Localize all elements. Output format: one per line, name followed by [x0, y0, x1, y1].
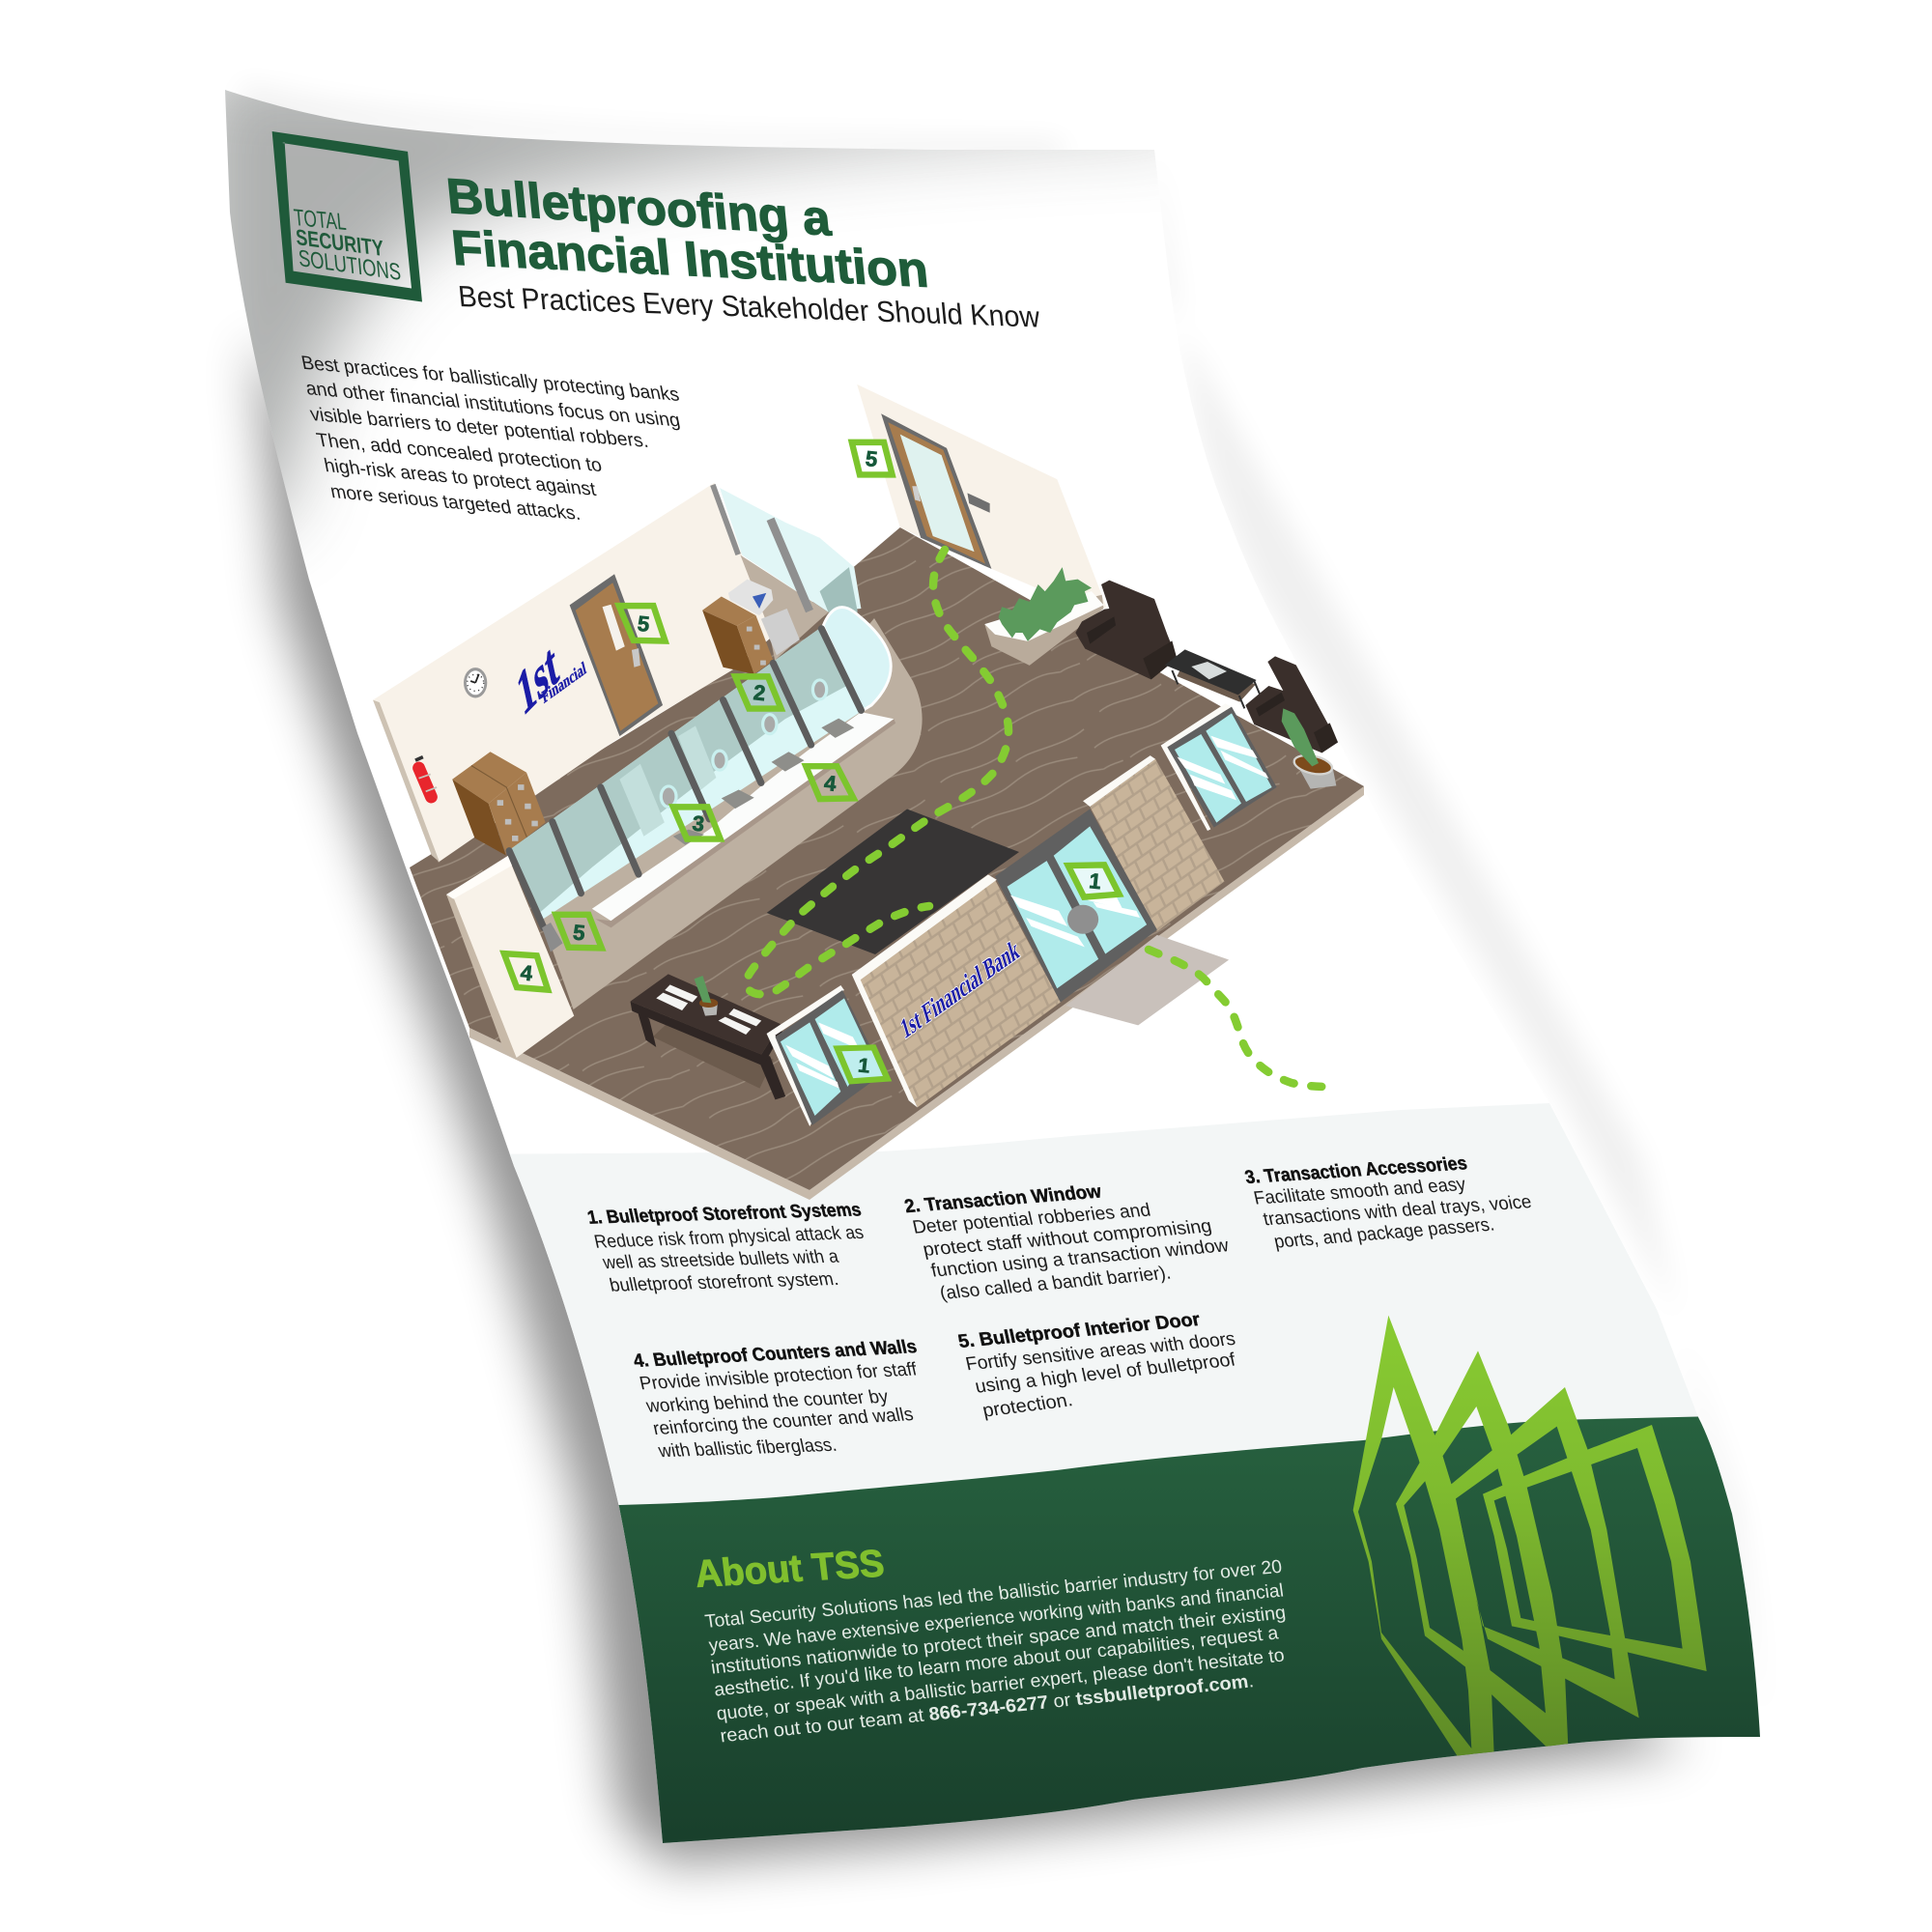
floor	[410, 527, 1364, 1190]
shape A	[1353, 1316, 1494, 1758]
badge 3	[673, 807, 721, 839]
about paragraph: reach out to our team at 866-734-6277 or tssbulletproof.com .	[719, 1670, 1255, 1747]
table shadow	[653, 1017, 774, 1089]
wall logo: 1st Financial: Financial	[540, 658, 587, 707]
entry step	[1065, 935, 1229, 1025]
intro paragraph: high-risk areas to protect against	[323, 455, 599, 500]
logo wordmark: SOLUTIONS	[298, 246, 402, 286]
item 3: transaction accessories: transactions with deal trays, voice	[1262, 1191, 1534, 1230]
item 3: transaction accessories: ports, and package passers.	[1272, 1214, 1496, 1253]
low table with plant	[630, 974, 785, 1099]
logo wordmark: SECURITY	[295, 225, 384, 261]
badge 1: front window: 1	[857, 1054, 871, 1077]
paper panels	[193, 58, 1797, 1864]
badge 2: 2	[753, 680, 767, 705]
intro paragraph	[299, 353, 682, 525]
clock	[464, 668, 487, 697]
entrance door	[995, 809, 1157, 1002]
file cabinet: small	[702, 596, 773, 674]
item 2: transaction window	[902, 1181, 1231, 1304]
front window	[767, 985, 880, 1126]
item 3: transaction accessories	[1243, 1152, 1534, 1253]
title: Bulletproofing a	[444, 169, 834, 246]
title	[444, 169, 931, 298]
badge 5: side door	[555, 915, 602, 948]
route: walking path outside	[1149, 950, 1329, 1087]
badge 5: side door: 5	[572, 921, 586, 945]
glass: rear panels	[710, 484, 861, 612]
item 5: interior door: 5. Bulletproof Interior Door	[956, 1309, 1203, 1352]
armchair right	[1245, 656, 1338, 753]
door sign	[967, 493, 990, 513]
glass: transaction window	[509, 626, 895, 927]
glass: curved end	[823, 608, 891, 710]
storefront sign: 1st Financial Bank	[897, 933, 1022, 1045]
badge 4: counter: 4	[823, 771, 838, 796]
planter grass	[999, 567, 1092, 641]
item 5: interior door: using a high level of bulletproof	[973, 1350, 1238, 1398]
badge 5: rear door: 5	[865, 446, 879, 471]
header and text layer	[272, 131, 1534, 1747]
badge 4: counter	[806, 766, 854, 799]
intro paragraph: visible barriers to deter potential robbers.	[308, 404, 650, 452]
item 1: storefront: bulletproof storefront system.	[608, 1268, 840, 1296]
item 3: transaction accessories: Facilitate smooth and easy	[1252, 1174, 1468, 1209]
left brick wall	[859, 880, 1061, 1107]
intro paragraph: more serious targeted attacks.	[328, 481, 582, 525]
intro paragraph: and other financial institutions focus on using	[304, 379, 682, 432]
badge 1: front window	[838, 1047, 888, 1081]
item 4: counters and walls: Provide invisible protection for staff	[638, 1359, 920, 1394]
table plant	[695, 976, 718, 1016]
paper sheet	[225, 90, 1760, 1843]
about paragraph: Total Security Solutions has led the ballistic barrier industry for over 20	[703, 1556, 1284, 1633]
file cabinet: large	[452, 752, 546, 855]
counter edge	[595, 719, 895, 927]
badge 1: entrance	[1068, 865, 1120, 897]
panel: top sheen shading	[193, 58, 1198, 522]
item 2: transaction window: protect staff without compromising	[921, 1215, 1213, 1261]
about paragraph: institutions nationwide to protect their space and match their existing	[710, 1603, 1287, 1679]
right window	[1161, 703, 1277, 831]
item 2: transaction window: (also called a bandit barrier).	[938, 1263, 1173, 1304]
item 2: transaction window: function using a transaction window	[929, 1235, 1231, 1282]
item 5: interior door: Fortify sensitive areas with doors	[964, 1328, 1237, 1375]
subtitle: Best Practices Every Stakeholder Should Know	[457, 280, 1042, 334]
item 1: storefront: well as streetside bullets with a	[600, 1246, 841, 1273]
route: walking path inside	[746, 550, 1009, 994]
shape C	[1449, 1387, 1639, 1718]
wall face	[857, 384, 1107, 609]
numbered badges	[504, 442, 1120, 1081]
tan behind counter	[740, 555, 828, 661]
item 5: interior door	[956, 1309, 1238, 1422]
item 1: storefront: 1. Bulletproof Storefront Systems	[585, 1200, 864, 1229]
shape B	[1396, 1350, 1568, 1749]
about paragraph: years. We have extensive experience working with banks and financial	[707, 1580, 1285, 1657]
wall face	[373, 483, 772, 862]
voice ports	[661, 680, 827, 807]
paper drop shadow	[242, 82, 1768, 1864]
intro paragraph: Then, add concealed protection to	[315, 430, 604, 476]
deal trays	[673, 719, 854, 845]
about paragraph: quote, or speak with a ballistic barrier expert, please don't hesitate to	[715, 1645, 1286, 1725]
low table	[1165, 649, 1260, 708]
item 4: counters and walls: reinforcing the counter and walls	[651, 1404, 916, 1439]
floor base edge	[469, 786, 1364, 1200]
back-right wall	[857, 384, 1107, 666]
about paragraph	[703, 1556, 1287, 1747]
item 5: interior door: protection.	[980, 1389, 1074, 1422]
carpet mat	[767, 810, 1019, 954]
door: left wall	[570, 574, 663, 736]
about heading: About TSS	[693, 1542, 887, 1596]
item 1: storefront: Reduce risk from physical attack as	[592, 1222, 866, 1253]
wall end thickness	[373, 700, 440, 862]
glass door	[881, 413, 991, 569]
badge 1: entrance: 1	[1088, 868, 1102, 894]
item 4: counters and walls: with ballistic fiberglass.	[655, 1435, 838, 1462]
illustration: isometric bank lobby	[373, 384, 1364, 1200]
badge 5: left door: 5	[637, 611, 651, 637]
wall logo: 1st Financial: 1st	[512, 628, 563, 729]
lounge furniture	[1075, 581, 1338, 789]
logo wordmark: TOTAL	[293, 206, 348, 236]
badge 3: 3	[691, 811, 705, 837]
fire extinguisher	[415, 757, 437, 797]
shape D	[1483, 1425, 1707, 1671]
item 4: counters and walls	[632, 1336, 920, 1462]
tan teller zone	[541, 618, 923, 1009]
table body	[630, 974, 785, 1099]
item 4: counters and walls: working behind the counter by	[643, 1386, 891, 1417]
panel: about band	[618, 1416, 1760, 1843]
item 2: transaction window: 2. Transaction Window	[902, 1181, 1103, 1217]
planter box	[984, 595, 1103, 666]
window posts	[509, 629, 861, 927]
badge 5: rear door	[852, 442, 893, 474]
logo: total security solutions	[272, 131, 422, 301]
planter top	[984, 591, 1103, 641]
counter top	[592, 712, 894, 921]
badge 4: partition	[504, 953, 548, 990]
logo mark: green frames	[1353, 1316, 1707, 1758]
about paragraph: aesthetic. If you'd like to learn more about our capabilities, request a	[713, 1623, 1280, 1701]
right wall cap	[1083, 755, 1155, 807]
wall logo: 1st Financial	[512, 628, 587, 729]
title: Financial Institution	[449, 221, 931, 298]
door closer	[542, 923, 562, 952]
back-left wall	[373, 483, 895, 952]
item 2: transaction window: Deter potential robberies and	[911, 1200, 1152, 1238]
armchair left	[1075, 581, 1177, 679]
intro paragraph: Best practices for ballistically protecting banks	[299, 353, 681, 406]
logo wordmark	[293, 206, 402, 286]
item 3: transaction accessories: 3. Transaction Accessories	[1243, 1152, 1469, 1188]
logo frame	[272, 131, 422, 301]
right brick wall	[1090, 759, 1224, 931]
storefront wall	[852, 755, 1229, 1107]
badge 4: partition: 4	[520, 960, 534, 985]
front partition wall	[446, 856, 574, 1058]
badge 2	[735, 676, 781, 709]
item 4: counters and walls: 4. Bulletproof Counters and Walls	[632, 1336, 919, 1372]
badge 5: left door	[619, 606, 666, 641]
panel: numbered list background	[464, 1103, 1719, 1565]
potted plant	[1282, 708, 1336, 789]
printer	[728, 580, 800, 655]
left wall cap	[852, 874, 997, 1107]
brochures	[656, 984, 761, 1035]
item 1: storefront	[585, 1200, 866, 1296]
